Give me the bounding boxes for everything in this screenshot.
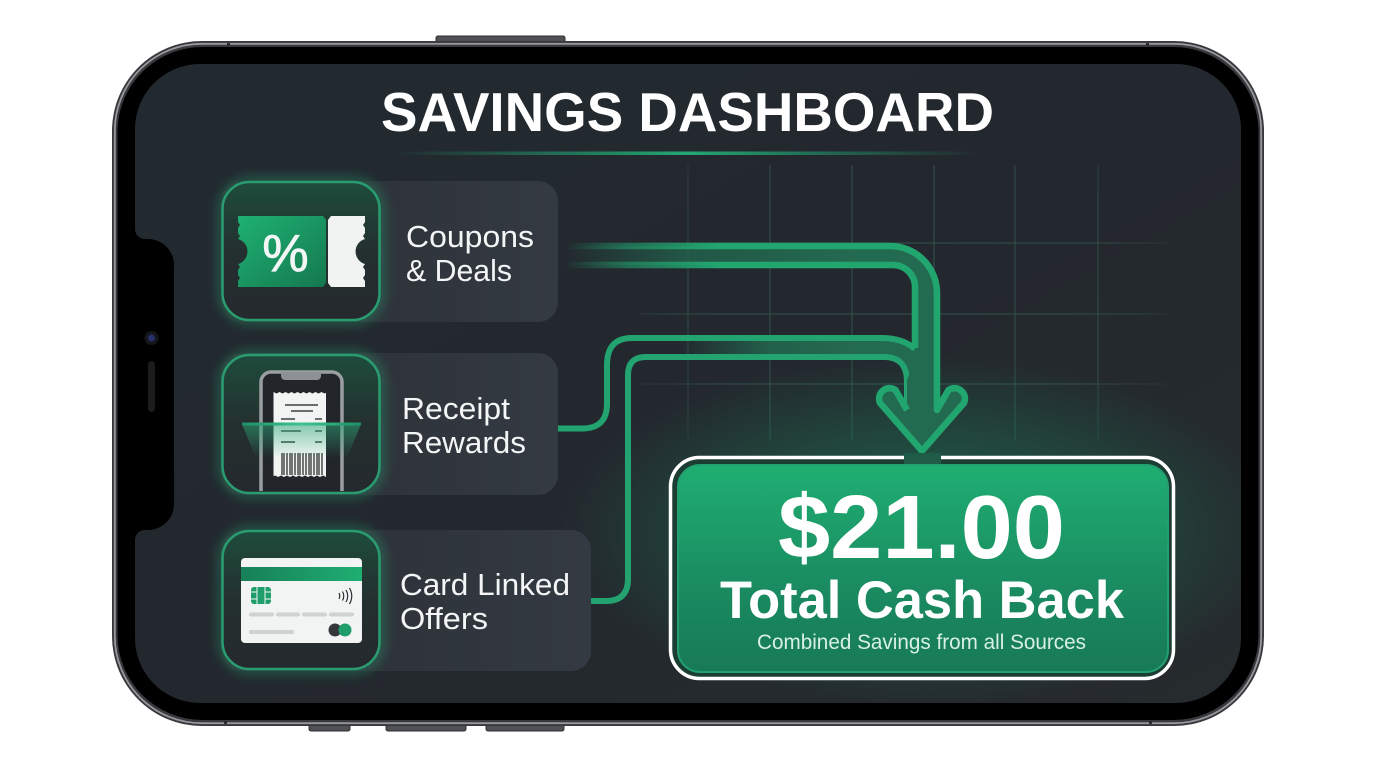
label: receipt rewards: Receipt <box>402 391 510 426</box>
panel: coupons and deals <box>221 181 558 322</box>
label: receipt rewards <box>402 391 526 460</box>
label: card linked offers: Card Linked <box>400 567 570 602</box>
arrow: coupons flow into total <box>568 246 965 451</box>
title underline <box>390 152 980 155</box>
label: card linked offers <box>400 567 570 636</box>
title: SAVINGS DASHBOARD <box>381 81 994 143</box>
panel: card linked offers <box>221 530 591 671</box>
icon: payment card <box>241 558 362 643</box>
background grid <box>640 165 1170 440</box>
earpiece speaker <box>148 361 155 412</box>
label: coupons and deals: Coupons <box>406 219 534 254</box>
phone body <box>112 41 1264 726</box>
amount: $21.00 <box>778 478 1065 578</box>
arrow: receipt and card flows merging <box>558 338 916 601</box>
green card <box>678 465 1168 672</box>
green glow behind total <box>608 378 1235 682</box>
label: coupons and deals <box>406 219 534 288</box>
outer white frame <box>670 458 1174 678</box>
icon: phone scanning receipt <box>242 372 361 491</box>
phone hardware buttons <box>309 36 565 731</box>
line: from receipt rewards <box>558 338 915 428</box>
panel: total cash back <box>670 453 1174 678</box>
icon box: card <box>222 531 380 669</box>
arrow gap connector <box>904 453 941 467</box>
label: card linked offers: Offers <box>400 601 488 636</box>
label: coupons and deals: & Deals <box>406 253 512 288</box>
frame inner backing <box>670 458 1174 678</box>
percent sign: % <box>262 225 309 283</box>
icon box: receipt <box>222 355 380 493</box>
panel: receipt rewards <box>221 353 558 495</box>
caption: Combined Savings from all Sources <box>757 631 1086 654</box>
screen with side notch <box>135 64 1241 703</box>
infographic: savings dashboard on a phone <box>112 36 1264 732</box>
icon box: coupon <box>222 182 380 320</box>
total heading: Total Cash Back <box>720 571 1125 630</box>
icon: coupon ticket <box>238 216 365 287</box>
line: from card linked offers <box>591 357 907 601</box>
label: receipt rewards: Rewards <box>402 425 526 460</box>
front camera <box>144 331 158 345</box>
